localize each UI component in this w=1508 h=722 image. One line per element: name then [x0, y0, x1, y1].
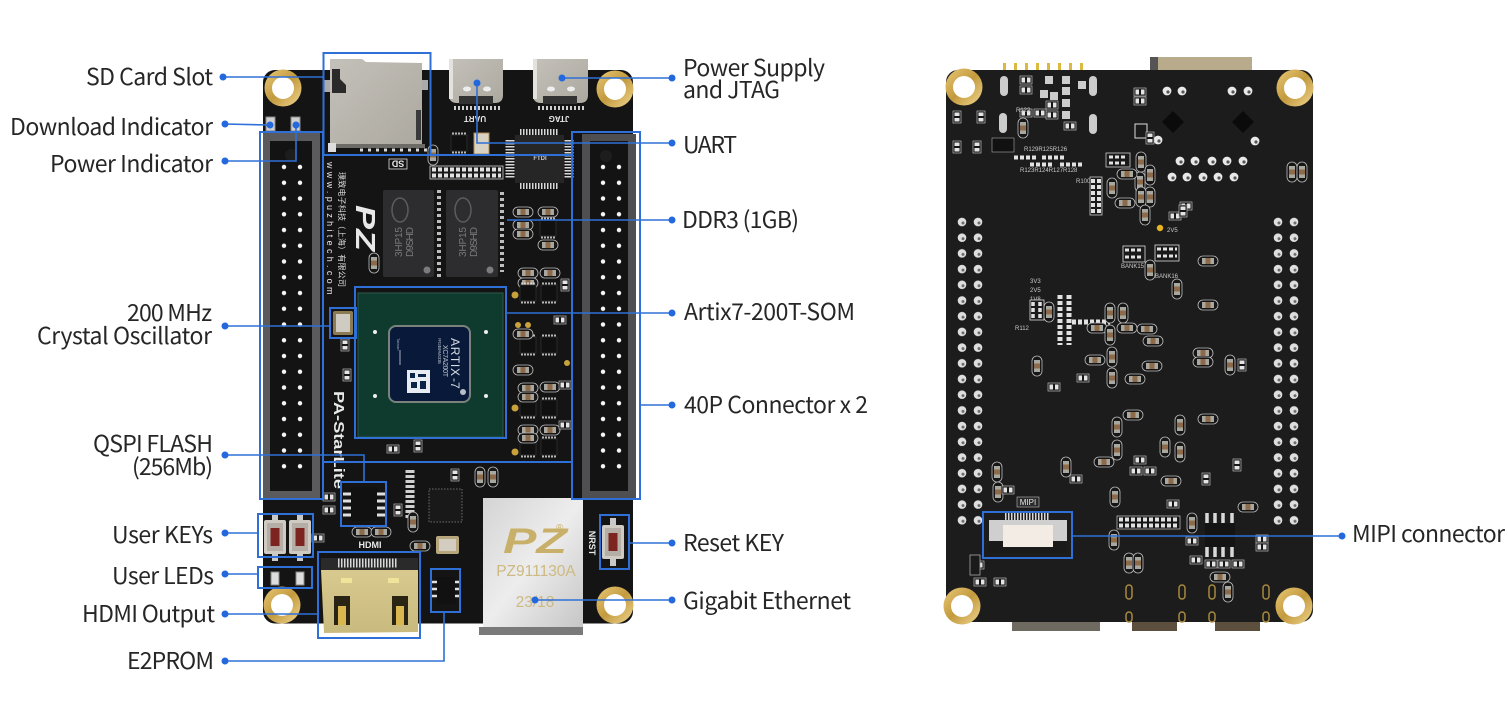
front board: [263, 59, 636, 635]
Gigabit Ethernet jack: [479, 498, 583, 635]
callout: User LEDs: User LEDs: [112, 557, 214, 591]
silkscreen labels: [325, 114, 597, 556]
top component group: 1V8: [1030, 297, 1041, 303]
callout: Artix7-200T-SOM: [506, 293, 855, 327]
FPGA die: -7: [448, 378, 462, 389]
HDMI connector: [321, 558, 418, 633]
power regulator section: [312, 145, 571, 551]
top component group: 2V5: [1167, 228, 1178, 234]
FPGA die: Taiwan: [396, 338, 401, 350]
MIPI silk label: [1017, 497, 1039, 507]
silkscreen labels: SD: [391, 158, 404, 168]
callout: MIPI connector: [1072, 515, 1505, 549]
callout: Download Indicator: Download Indicator: [10, 108, 213, 142]
top component group: BANK15: [1121, 264, 1145, 270]
top component group: 3V3: [1030, 279, 1041, 285]
indicator LEDs top: [266, 117, 300, 131]
callout: Gigabit Ethernet: [532, 582, 851, 616]
callout: Power Supply and JTAG: Power Supply: [683, 49, 825, 83]
silkscreen labels: PA-StarLite: [330, 391, 347, 489]
top component group: R129R125R126: [1024, 147, 1068, 153]
callout: 200 MHz Crystal Oscillator: [37, 294, 330, 351]
callout: SD Card Slot: [86, 58, 323, 92]
back board: [944, 57, 1314, 631]
FPGA SOM substrate: [358, 293, 503, 437]
back signal chip: [1190, 513, 1244, 568]
reset key: [602, 518, 624, 566]
callout: Gigabit Ethernet: Gigabit Ethernet: [683, 582, 851, 616]
Gigabit Ethernet jack: ®: [556, 523, 564, 534]
callout: 200 MHz Crystal Oscillator: Crystal Oscillator: [37, 317, 212, 351]
callout: DDR3 (1GB): [507, 201, 799, 235]
front PCB base: [263, 70, 633, 624]
callout: DDR3 (1GB): DDR3 (1GB): [682, 201, 799, 235]
decoupling strip between DDR chips: [439, 190, 502, 277]
E2PROM chip: [431, 577, 461, 604]
DDR3 chip 2: D9SHD: [469, 227, 480, 257]
callout: Reset KEY: Reset KEY: [683, 524, 785, 558]
Gigabit Ethernet jack: PZ: [503, 522, 569, 561]
Gigabit Ethernet jack: 23/18: [516, 594, 554, 611]
callout: UART: [474, 80, 737, 160]
back right pin holes: [1270, 214, 1302, 528]
top component group: BANK16: [1155, 274, 1179, 280]
user keys: [264, 513, 311, 561]
top component group: R100: [1076, 179, 1091, 185]
resistor pad row: [430, 166, 503, 179]
callout: HDMI Output: [82, 595, 318, 629]
callout: E2PROM: E2PROM: [127, 642, 214, 676]
DDR3 chip 2: [446, 190, 498, 277]
silkscreen labels: www.puzhitech.com: [325, 161, 335, 297]
callout: Power Supply and JTAG: [558, 49, 825, 105]
silkscreen labels: HDMI: [358, 540, 382, 550]
callout: UART: UART: [683, 126, 737, 160]
FPGA die: ARTIX: [448, 338, 462, 376]
Gigabit Ethernet jack: PZ911130A: [496, 563, 576, 580]
connector shells behind board: [1003, 57, 1260, 631]
FPGA die: [389, 326, 470, 402]
200 MHz crystal: [333, 311, 353, 335]
callout: Reset KEY: [629, 524, 785, 558]
callout: SD Card Slot: SD Card Slot: [86, 58, 213, 92]
back PCB base: [946, 70, 1313, 622]
callout: Power Indicator: Power Indicator: [50, 145, 213, 179]
DDR3 chip 1: 3HP15: [394, 227, 405, 257]
callout: QSPI FLASH: [93, 425, 364, 482]
callout: QSPI FLASH: QSPI FLASH: [93, 425, 213, 459]
back mounting holes: [944, 68, 1314, 624]
top vias and mounting recesses: [999, 76, 1259, 181]
back capacitors: [970, 118, 1307, 602]
callout: E2PROM: [127, 612, 444, 676]
top component group: R112: [1015, 326, 1030, 332]
USB-C connector JTAG: [533, 59, 588, 108]
MIPI silk label: MIPI: [1020, 498, 1036, 507]
right 40P connector: [582, 134, 636, 498]
top component group: R123R124R127R128: [1020, 168, 1078, 174]
FPGA die: FFG484AMX2035: [437, 338, 442, 364]
callout: HDMI Output: HDMI Output: [82, 595, 215, 629]
UART bridge chip: FTDI: [533, 156, 547, 162]
silkscreen labels: JTAG: [549, 114, 569, 123]
top component group: [953, 76, 1192, 345]
Y2 crystal: [436, 536, 459, 554]
top component group: R122: [1016, 108, 1031, 114]
callout: 40P Connector x 2: 40P Connector x 2: [684, 386, 868, 420]
user LEDs: [271, 572, 304, 585]
DDR3 chip 1: D9SHD: [405, 227, 416, 257]
MIPI connector: [988, 518, 1067, 553]
silkscreen labels: 璞致电子科技（上海）有限公司: [337, 172, 347, 287]
silkscreen labels: UART: [464, 114, 486, 123]
callout: User KEYs: [112, 516, 258, 550]
back left pin holes: [954, 214, 986, 528]
callout: Power Supply and JTAG: and JTAG: [683, 71, 780, 105]
SD card slot: [324, 59, 430, 152]
Ethernet PHY chip: [429, 489, 462, 522]
left 40P connector: [263, 133, 320, 498]
callout: Power Indicator: [50, 122, 300, 179]
bottom plated slots: [1126, 585, 1269, 622]
silkscreen labels: NRST: [587, 531, 597, 556]
USB-C connector UART: [449, 59, 503, 108]
callout: QSPI FLASH: (256Mb): [132, 448, 213, 482]
mounting holes: [264, 70, 634, 624]
silkscreen labels: PZ: [350, 205, 381, 252]
callout: User KEYs: User KEYs: [112, 516, 213, 550]
back pad strip: [1117, 516, 1180, 529]
DDR3 chip 1: [383, 190, 434, 277]
UART bridge chip: [510, 132, 569, 186]
UART crystal: [451, 132, 489, 154]
callout: Artix7-200T-SOM: Artix7-200T-SOM: [684, 293, 855, 327]
callout: MIPI connector: MIPI connector: [1352, 515, 1505, 549]
QSPI flash chip: [343, 487, 385, 521]
callout: 200 MHz Crystal Oscillator: 200 MHz: [127, 294, 212, 328]
DDR3 chip 2: 3HP15: [458, 227, 469, 257]
callout: User LEDs: [112, 557, 258, 591]
FPGA die: XC7A200T: [441, 345, 448, 378]
highlight frames: [258, 53, 1072, 638]
top component group: 2V5: [1030, 288, 1041, 294]
